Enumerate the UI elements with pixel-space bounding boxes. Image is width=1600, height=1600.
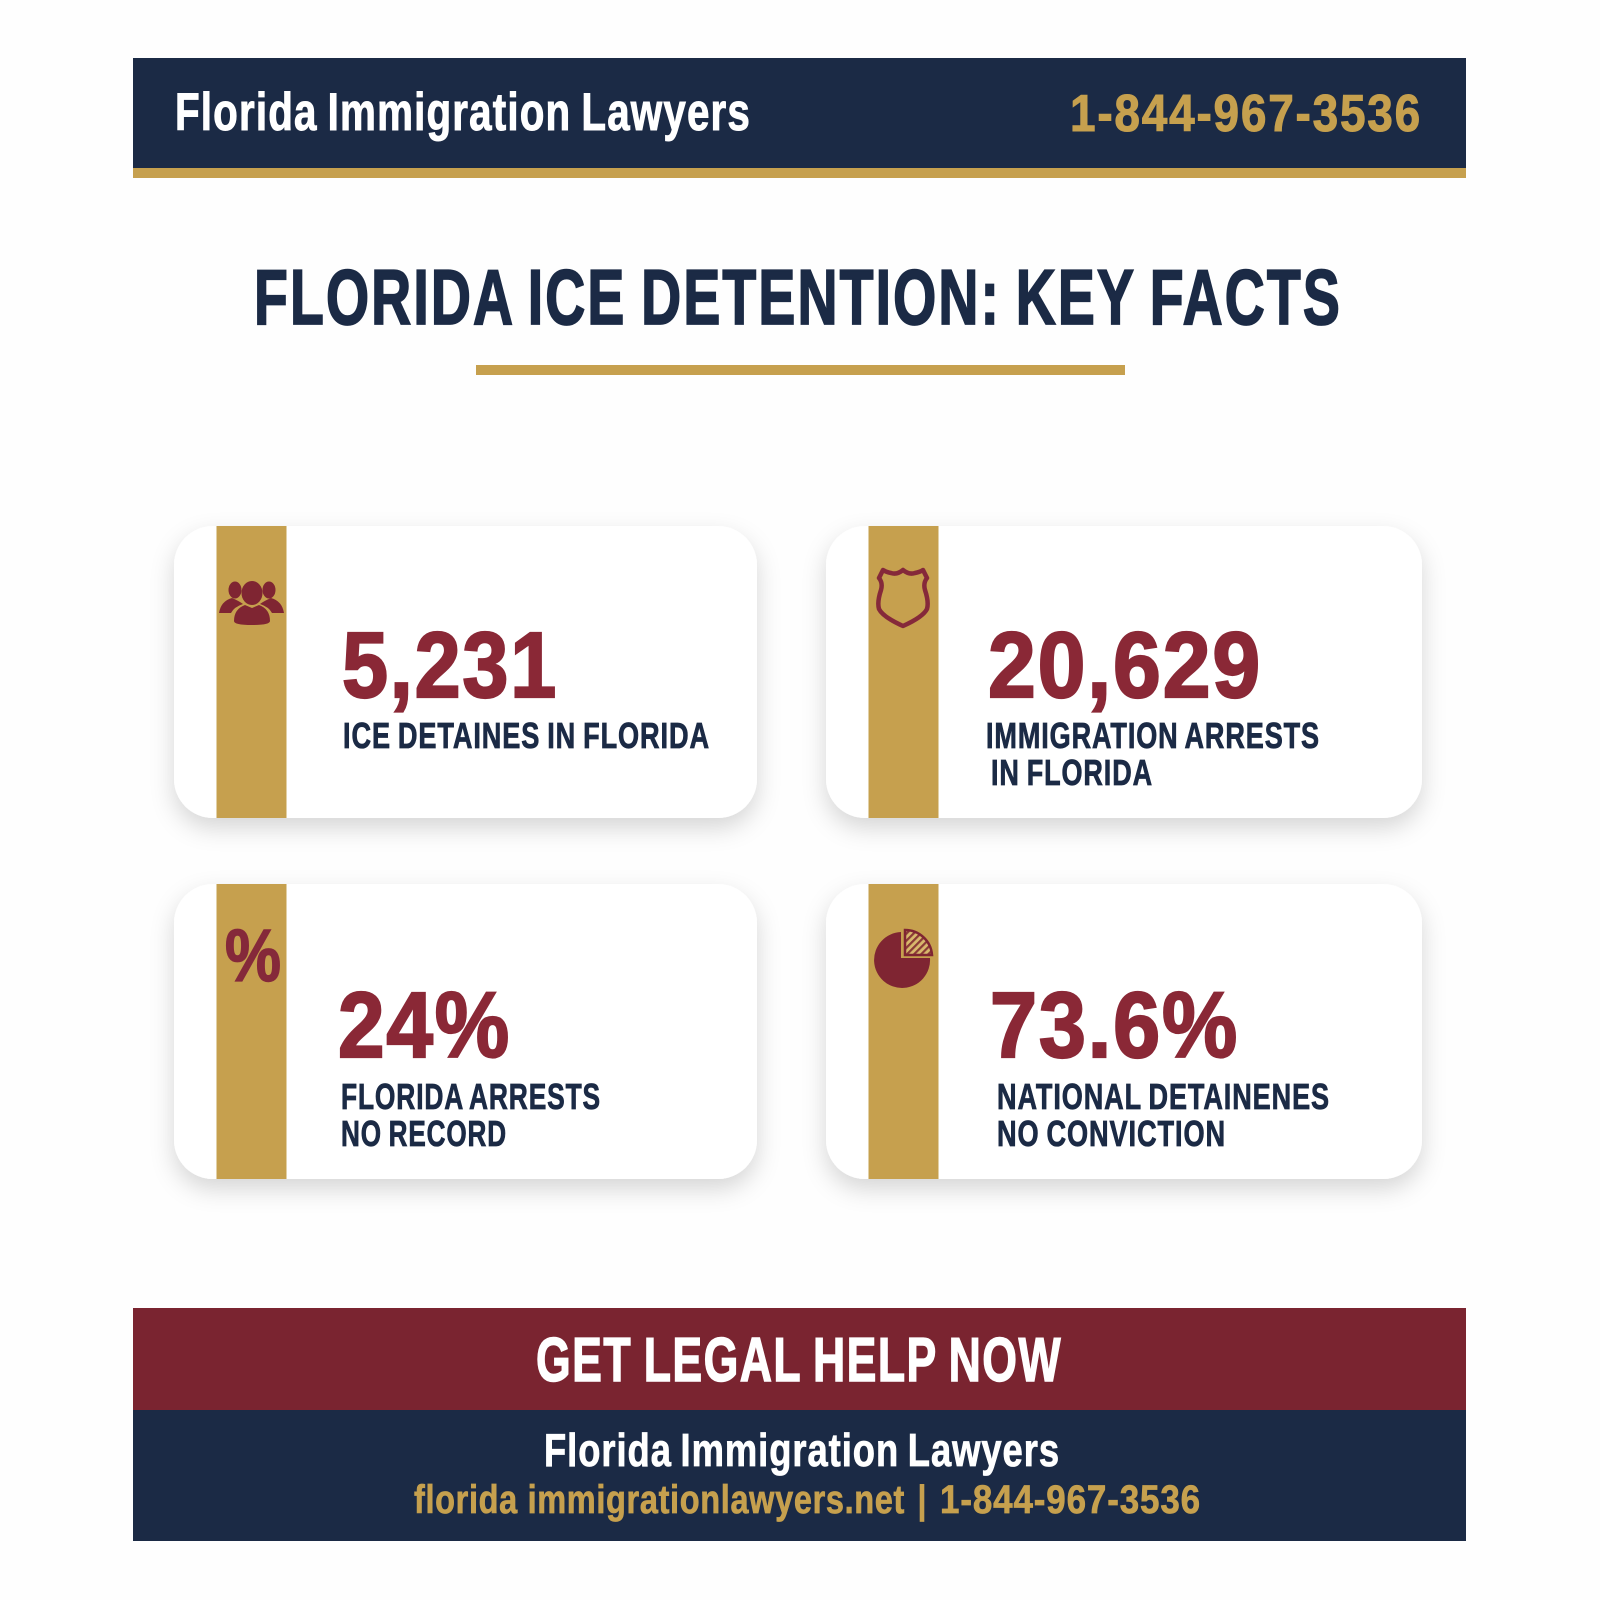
label: immigration arrests in Florida bbox=[986, 715, 1320, 793]
label: Florida arrests no record: NO RECORD bbox=[341, 1113, 507, 1154]
title underline bbox=[476, 365, 1125, 375]
call to action banner bbox=[133, 1308, 1466, 1410]
header phone number: 1-844-967-3536 bbox=[1070, 85, 1422, 143]
icon: pie chart bbox=[874, 930, 932, 988]
label: national detainenes no conviction: NATIONAL DETAINENES bbox=[997, 1076, 1330, 1117]
label: national detainenes no conviction: NO CONVICTION bbox=[997, 1113, 1226, 1154]
panel: Florida arrests no record bbox=[174, 884, 757, 1179]
label: immigration arrests in Florida: IMMIGRATION ARRESTS bbox=[986, 715, 1320, 756]
icon: percent: % bbox=[225, 914, 281, 997]
footer firm name: Florida Immigration Lawyers bbox=[544, 1424, 1060, 1476]
header bar bbox=[133, 58, 1466, 178]
stat: 24%: 24% bbox=[338, 973, 511, 1077]
label: Florida arrests no record bbox=[341, 1076, 601, 1154]
label: immigration arrests in Florida: IN FLORIDA bbox=[991, 752, 1153, 793]
panel: national detainees no conviction bbox=[826, 884, 1422, 1179]
label: Florida arrests no record: FLORIDA ARRESTS bbox=[341, 1076, 601, 1117]
footer website and phone: | bbox=[917, 1478, 927, 1522]
label: national detainenes no conviction bbox=[997, 1076, 1330, 1154]
stat: 5,231: 5,231 bbox=[342, 613, 558, 717]
panel: ICE detainees bbox=[174, 526, 757, 818]
footer website and phone: 1-844-967-3536 bbox=[940, 1478, 1201, 1522]
panel: immigration arrests bbox=[826, 526, 1422, 818]
footer contact block bbox=[133, 1410, 1466, 1541]
stat: 20,629: 20,629 bbox=[988, 613, 1262, 717]
call to action text: GET LEGAL HELP NOW bbox=[536, 1326, 1062, 1395]
icon: group of people bbox=[219, 581, 284, 625]
label: ICE detaines in Florida: ICE DETAINES IN FLORIDA bbox=[343, 715, 710, 756]
icon: shield bbox=[878, 570, 928, 626]
footer website and phone: florida immigrationlawyers.net bbox=[414, 1478, 905, 1522]
header firm name: Florida Immigration Lawyers bbox=[175, 83, 751, 142]
stat: 73.6%: 73.6% bbox=[990, 973, 1239, 1077]
